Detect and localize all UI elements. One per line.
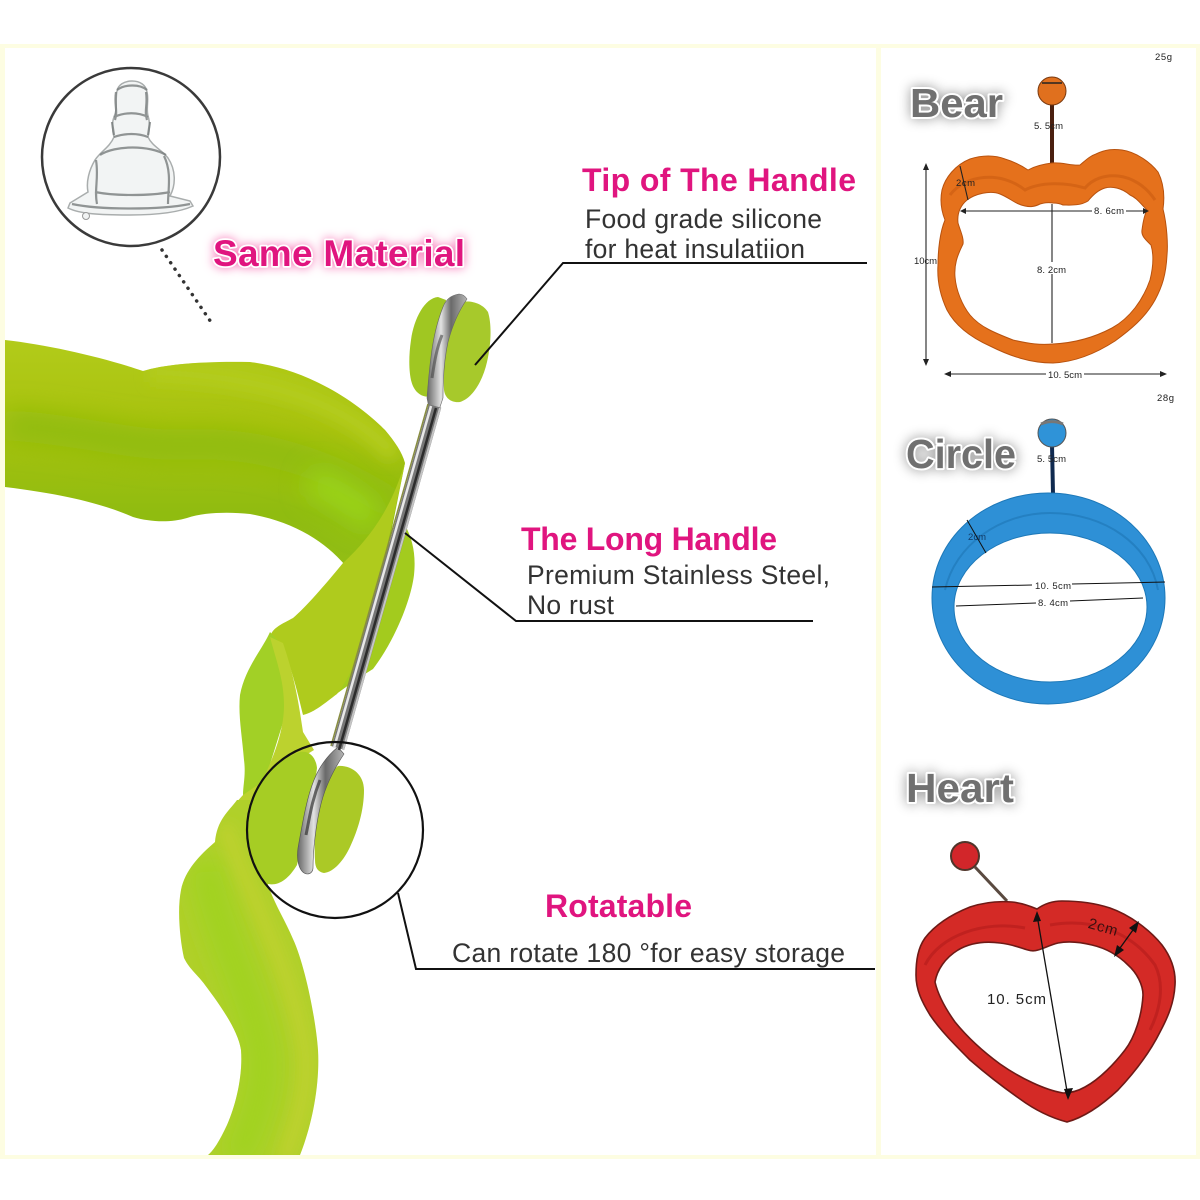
dimension lines and labels: 2cm [968,532,986,543]
bear ring [914,77,1167,381]
dimension arrows and labels: 10. 5cm [987,991,1046,1008]
upper right disc [444,301,491,402]
circle ring [932,419,1165,704]
dimension lines and labels: 8. 4cm [1038,598,1068,609]
text block: long handle: Premium Stainless Steel, [527,560,830,590]
text block: long handle: No rust [527,590,615,620]
upper band [5,340,405,628]
circle handle [1038,419,1066,494]
upper metal hook [427,294,467,410]
weight label: 28g: 28g [1157,393,1174,404]
heart handle [951,842,1007,901]
long metal handle [331,404,440,750]
heading: circle: Circle [906,431,1016,477]
text block: tip of the handle: for heat insulatiion [585,234,805,264]
text block: long handle [521,521,830,620]
dimension lines and labels: 10. 5cm [1048,370,1082,381]
dotted connector [162,250,213,325]
dimension lines and labels: 10. 5cm [1035,581,1071,592]
text block: tip of the handle: Food grade silicone [585,204,822,234]
dimension lines and labels: 5. 5cm [1037,454,1066,465]
dimension lines and labels: 8. 2cm [1037,265,1066,276]
dimension lines and labels: 2cm [956,178,975,189]
lower band [179,800,318,1155]
leader: tip of the handle [475,263,867,365]
heart ring [916,842,1175,1122]
dimension arrows and labels [987,911,1139,1100]
dimension arrows and labels: 2cm [1086,915,1120,940]
text block: tip of the handle: Tip of The Handle [582,162,856,198]
text block: long handle: The Long Handle [521,521,777,557]
heading: heart: Heart [906,765,1014,811]
weight label: 25g: 25g [1155,52,1172,63]
bear handle [1038,77,1066,164]
green bulge in twist [239,632,290,795]
green egg ring photo [5,294,491,1165]
callout: rotation circle [247,742,423,918]
text block: tip of the handle [582,162,856,264]
upper left disc [409,297,446,397]
lower right disc [315,766,364,873]
lower metal hook [297,747,344,874]
dimension lines and labels: 8. 6cm [1094,206,1124,217]
light strip in twist [215,637,314,880]
heading: same material: Same Material [213,233,465,274]
text block: rotatable: Rotatable [545,888,692,924]
leader: long handle [405,533,813,621]
text block: rotatable [452,888,845,968]
dimension lines and labels [932,454,1165,609]
leader: rotatable [398,893,875,969]
lower left disc [248,752,317,884]
front strip [270,463,405,715]
icon: silicone nipple in circle [42,68,220,246]
dimension lines and labels: 10cm [914,256,937,267]
dimension lines and labels: 5. 5cm [1034,121,1063,132]
heading: bear: Bear [910,80,1003,126]
text block: rotatable: Can rotate 180 °for easy storage [452,938,845,968]
right lobe behind handle [300,525,415,711]
dimension lines and labels [914,121,1167,381]
